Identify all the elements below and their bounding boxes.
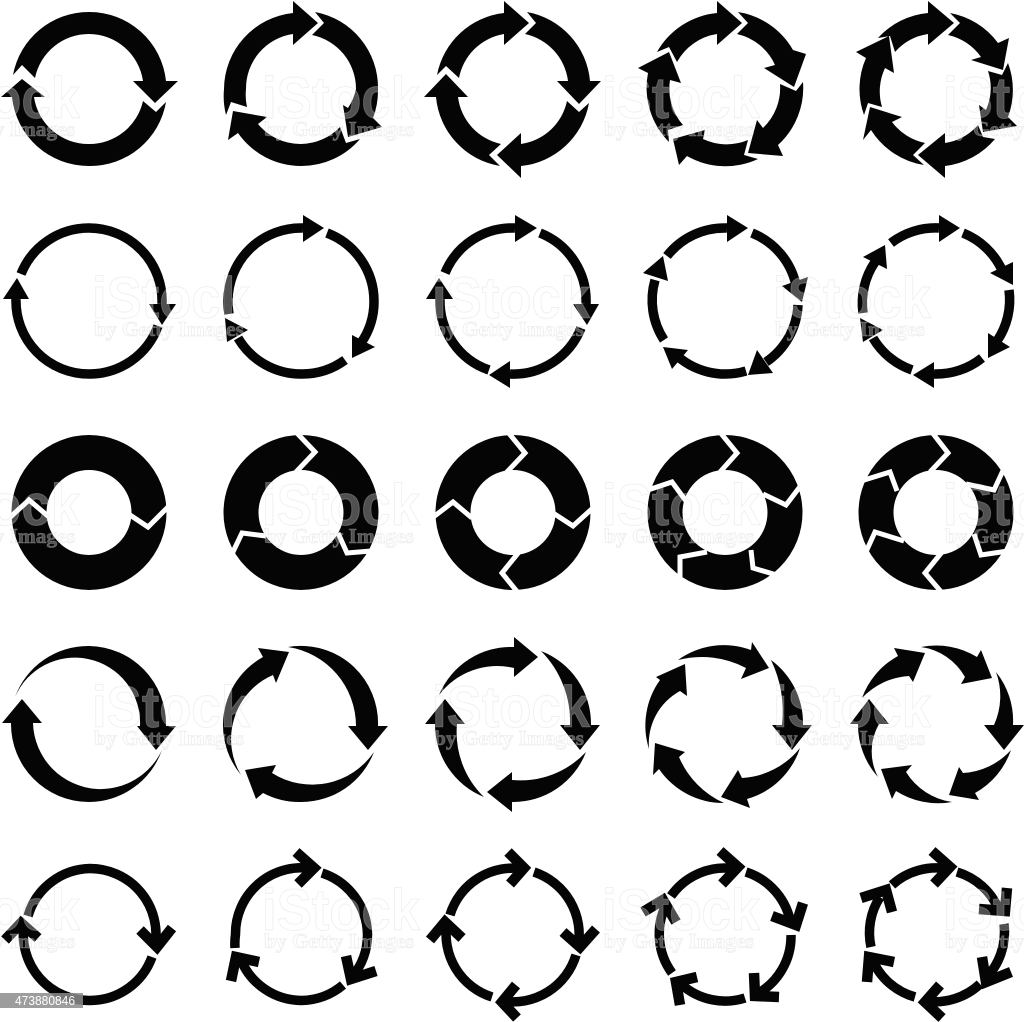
watermark layer: iStock by Getty Images: iStock [92, 675, 251, 740]
row 3: solid donut segments [7, 431, 1008, 594]
image id tag: 473880846 [15, 994, 75, 1008]
watermark layer: iStock by Getty Images: iStock [773, 675, 932, 740]
watermark layer: iStock by Getty Images: iStock [602, 878, 761, 943]
icon: thin ring, 3 arrows [225, 215, 375, 374]
watermark layer: iStock by Getty Images: iStock [262, 473, 421, 538]
watermark layer: iStock by Getty Images: by Getty Images [434, 726, 584, 750]
row 1: thick ring arrows [1, 1, 1017, 178]
icon: donut, 3 segments [231, 431, 371, 572]
icon: thin ring, 5 arrows [643, 215, 808, 375]
icon: thick ring, 3 arrows [224, 1, 382, 166]
icon: thick ring, 2 arrows [1, 12, 178, 166]
watermark layer: iStock by Getty Images: iStock [432, 266, 591, 331]
row 4: tapered swoosh arrows [2, 637, 1024, 812]
icon: donut, 6 segments [861, 431, 1008, 594]
watermark layer: iStock by Getty Images: iStock [773, 266, 932, 331]
watermark layer: iStock by Getty Images: by Getty Images [94, 317, 244, 341]
icon: thin ring, 6 arrows [860, 215, 1013, 388]
watermark layer: iStock by Getty Images: iStock [602, 473, 761, 538]
watermark layer: iStock by Getty Images: by Getty Images [604, 929, 754, 953]
row 2: thin ring arrows [3, 215, 1013, 388]
icon: donut, 5 segments [645, 431, 802, 586]
icon: thick ring, 5 arrows [638, 1, 806, 166]
row 5: line arrows with open chevron heads [5, 851, 1011, 1018]
icon: thin ring, 4 arrows [426, 215, 599, 388]
watermark layer: iStock by Getty Images: by Getty Images [775, 317, 925, 341]
icon: line ring, 4 arrows [430, 852, 596, 1018]
icon: thick ring, 6 arrows [856, 1, 1017, 178]
icon: swoosh, 6 arrows [850, 645, 1024, 803]
icon: line ring, 5 arrows [643, 851, 803, 1005]
watermark layer: iStock by Getty Images: by Getty Images [604, 524, 754, 548]
icon: thin ring, 2 arrows [3, 228, 176, 374]
watermark layer: iStock by Getty Images: by Getty Images [264, 117, 414, 141]
icon: swoosh, 4 arrows [425, 637, 600, 812]
watermark layer: iStock by Getty Images: iStock [92, 266, 251, 331]
watermark layer: iStock by Getty Images: by Getty Images [434, 317, 584, 341]
watermark layer: iStock by Getty Images: by Getty Images [775, 726, 925, 750]
icon: line ring, 3 arrows [231, 852, 376, 1000]
icon: donut, 2 segments [7, 452, 170, 572]
icon: line ring, 2 arrows [5, 868, 172, 1001]
icon: thick ring, 4 arrows [424, 1, 601, 178]
watermark layer: iStock by Getty Images: by Getty Images [264, 929, 414, 953]
watermark layer: iStock by Getty Images: iStock [602, 66, 761, 131]
icon: line ring, 6 arrows [861, 851, 1011, 1018]
watermark layer: iStock by Getty Images: iStock [262, 66, 421, 131]
watermark layer: iStock by Getty Images: iStock [432, 675, 591, 740]
icon: swoosh, 3 arrows [223, 646, 388, 802]
icon: swoosh, 2 arrows [2, 646, 176, 802]
watermark layer: iStock by Getty Images: by Getty Images [604, 117, 754, 141]
icon: donut, 4 segments [432, 431, 594, 594]
watermark layer: iStock by Getty Images: iStock [262, 878, 421, 943]
watermark layer: iStock by Getty Images: by Getty Images [94, 726, 244, 750]
watermark layer: iStock by Getty Images: by Getty Images [264, 524, 414, 548]
icon: swoosh, 5 arrows [645, 642, 812, 808]
